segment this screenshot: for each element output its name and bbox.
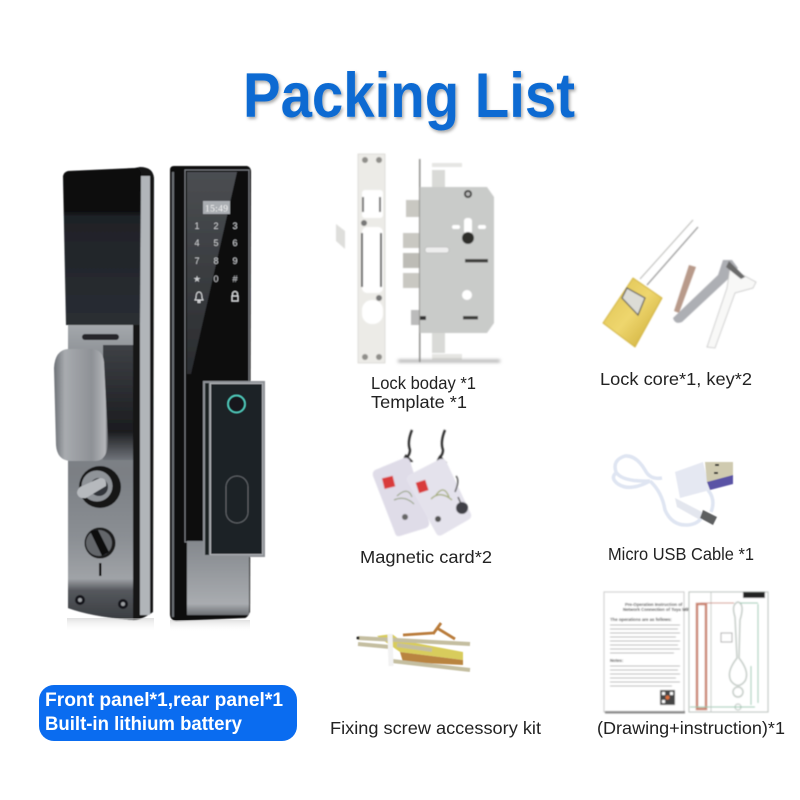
label: micro USB cable: Micro USB Cable *1	[608, 544, 754, 564]
title: Packing List	[243, 61, 575, 131]
keypad numbers: 8	[213, 256, 219, 266]
keypad numbers	[193, 221, 238, 284]
label: lock body	[371, 373, 476, 412]
gold screw	[403, 623, 455, 639]
fingerprint ring	[228, 396, 245, 412]
lock core pins	[640, 220, 698, 285]
metal face plate	[68, 325, 133, 620]
clock display	[203, 201, 230, 214]
sheet title: Network Connection of Tuya WiFi	[623, 607, 691, 612]
label: fixing screws: Fixing screw accessory kit	[330, 718, 541, 738]
keypad numbers: ★	[193, 274, 201, 284]
label: lock body: Template *1	[371, 392, 467, 412]
callout: panel contents: Front panel*1,rear panel*1	[45, 689, 283, 711]
keypad numbers: 3	[232, 221, 238, 231]
glass reflection	[187, 172, 237, 374]
label: lock core: Lock core*1, key*2	[600, 369, 752, 389]
keypad numbers: 6	[232, 238, 238, 248]
thumb turn	[77, 466, 121, 508]
screws	[75, 595, 128, 609]
instruction sheet	[604, 592, 691, 714]
icon: doorbell	[195, 292, 203, 302]
template outline	[697, 604, 706, 709]
callout: panel contents: Built-in lithium battery	[45, 713, 242, 735]
card right	[407, 459, 471, 536]
keypad numbers: 5	[213, 238, 219, 248]
side chrome stripe	[140, 176, 150, 615]
brass lock core	[603, 278, 662, 347]
lock core and keys	[603, 220, 756, 348]
speaker slot	[82, 334, 119, 340]
front panel body	[68, 167, 154, 620]
yellow plates	[377, 634, 463, 660]
rear panel body	[170, 166, 251, 621]
coiled cable	[613, 456, 713, 525]
sheet title: Notes:	[610, 658, 624, 663]
dimension lines	[690, 603, 758, 707]
installation drawing	[689, 592, 768, 712]
lanyards	[402, 430, 445, 464]
small knob	[84, 528, 116, 558]
front panel of the lock	[54, 167, 154, 620]
drawing header	[743, 592, 765, 598]
fixing screws	[356, 623, 470, 670]
sheet body lines	[610, 625, 680, 686]
sheet title	[610, 602, 691, 663]
icon: padlock	[232, 292, 238, 301]
oval outline	[226, 476, 248, 523]
flat key	[707, 268, 756, 348]
lock case	[403, 159, 494, 362]
strike plate template	[358, 154, 385, 363]
keypad numbers: 2	[213, 221, 219, 231]
expansion bolts	[358, 638, 470, 670]
zip tie	[390, 634, 391, 666]
keypad glass	[185, 170, 249, 542]
keypad numbers: 1	[194, 221, 200, 231]
card left	[373, 458, 429, 536]
dark band beside handle	[103, 345, 133, 460]
small plate	[336, 224, 345, 249]
keypad numbers: #	[232, 274, 238, 284]
front panel reflection	[67, 618, 154, 632]
door hole outline	[729, 602, 747, 686]
rear panel reflection	[170, 620, 250, 632]
lower plate	[187, 541, 249, 615]
clock display: 15:49	[205, 204, 228, 214]
keypad numbers: 9	[232, 256, 238, 266]
keypad numbers: 0	[213, 274, 219, 284]
black glass top	[63, 168, 141, 325]
magnetic cards	[373, 430, 471, 536]
ground shadow	[398, 360, 500, 362]
micro plug	[675, 498, 717, 525]
keypad numbers: 7	[194, 256, 200, 266]
sheet title: Pre-Operation Instruction of	[625, 602, 683, 607]
keypad numbers: 4	[194, 238, 200, 248]
handle	[54, 349, 108, 461]
key on ring	[674, 265, 696, 313]
label: magnetic card: Magnetic card*2	[360, 547, 492, 567]
USB plug	[675, 462, 733, 498]
micro USB cable	[613, 456, 733, 525]
lock body and template	[336, 154, 500, 363]
sheet title: The operations are as follows:	[610, 617, 672, 622]
indicator slit	[99, 563, 101, 576]
callout: panel contents	[39, 685, 297, 741]
fingerprint module	[203, 381, 265, 557]
label: drawing and instruction: (Drawing+instruction)*1	[597, 718, 785, 738]
rear panel of the lock	[170, 166, 265, 621]
callout box	[721, 633, 732, 642]
QR code	[660, 690, 675, 705]
label: lock body: Lock boday *1	[371, 373, 476, 393]
